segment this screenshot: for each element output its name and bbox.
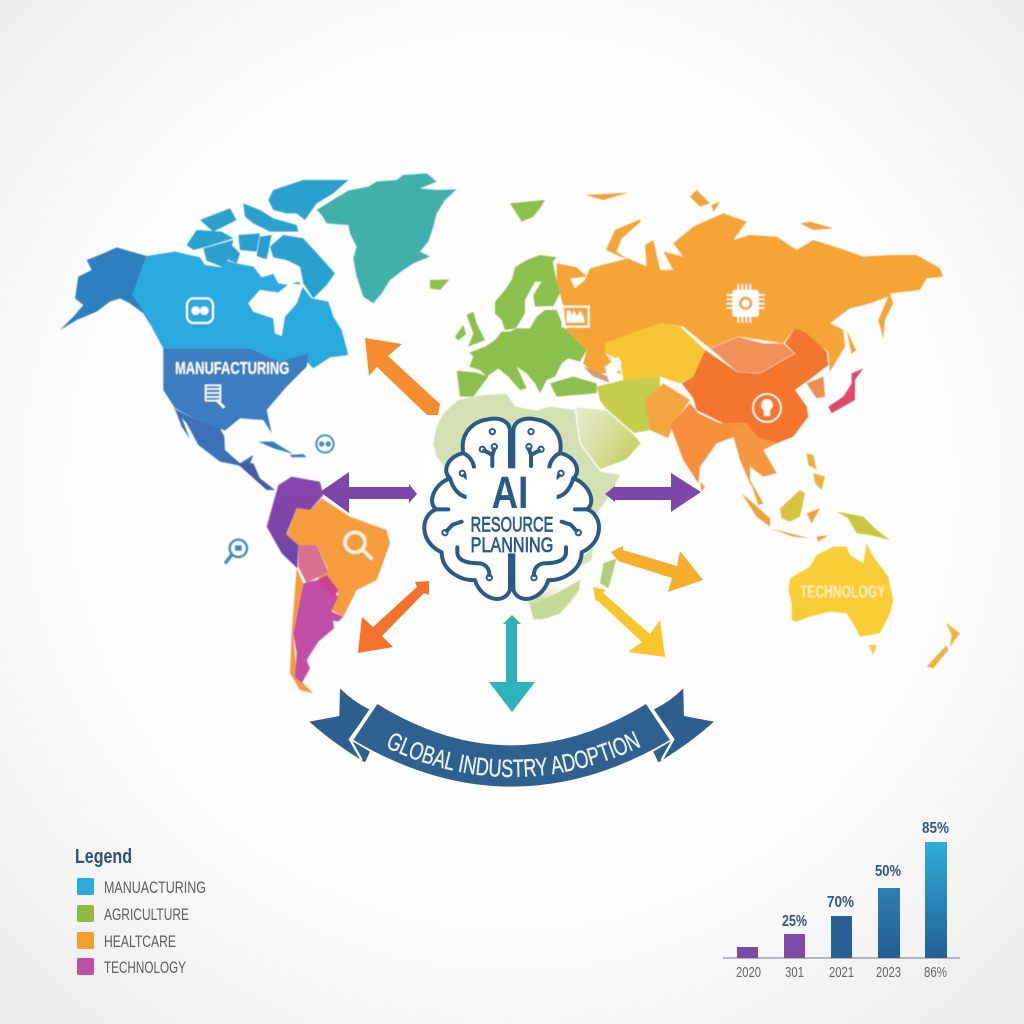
legend: manufacturing: MANUACTURING [104,878,206,897]
Korea [807,377,825,398]
bar 301: 25% [782,913,807,930]
legend: technology: TECHNOLOGY [104,958,186,977]
Borneo [780,490,805,522]
Canada [133,252,348,368]
Britain [467,312,485,347]
Brazil [287,498,390,617]
Arctic islands [585,190,833,230]
Paraguay [317,575,338,597]
Ireland [455,325,466,341]
bar 2023 [875,863,901,981]
arrow: west purple [320,472,417,513]
icon: magnifier left of South America [226,540,247,562]
arrow: southwest orange [358,581,429,653]
banner [309,688,714,787]
bar 86%: 86% [924,964,947,981]
Hudson Bay [248,283,303,336]
region: Oceania [742,480,960,668]
Philippines [807,453,825,490]
Sri Lanka [700,482,705,492]
banner fold lines [350,712,673,760]
legend: healthcare: HEALTCARE [104,932,176,951]
brain text: Resource: RESOURCE [471,512,553,536]
Mongolia [710,337,795,373]
Southeast Asia [732,423,777,498]
bar 2020 [736,947,761,981]
China [682,328,828,443]
bar 2023: 50% [875,863,901,880]
Europe mainland [469,310,587,393]
region: southern Africa [530,580,580,619]
region: Madagascar [600,558,617,588]
brain centre cover [467,468,557,553]
Caucasus [583,367,612,383]
region: South America [226,477,390,693]
Arctic islands [187,180,348,298]
region: Europe [430,200,597,397]
Argentina [293,580,338,683]
region: Asia [557,190,943,498]
banner title: GLOBAL INDUSTRY ADOPTION [388,731,640,778]
Japan [828,368,863,413]
axis [723,957,960,959]
Caspian [605,357,625,393]
banner main band [353,704,670,787]
Cuba [258,442,293,454]
brain text: Planning: PLANNING [471,533,553,557]
Iberia [457,371,488,397]
Hispaniola [290,454,307,457]
Tasmania [868,645,877,655]
arrow: east-southeast amber [611,546,703,592]
icon: factory badge [563,307,589,327]
bar 2021: 2021 [829,964,854,981]
Iceland [430,279,449,290]
region: Africa [433,394,620,620]
icon: magnifier on Brazil [345,532,371,558]
bar chart [723,820,960,981]
legend: agriculture: AGRICULTURE [104,905,189,924]
arrow: east purple [605,473,701,512]
brain right half [513,419,599,599]
USA [163,348,308,433]
arrow: south teal [489,615,535,712]
Svalbard [510,200,545,222]
icon: Canada gear badge [187,298,213,323]
New Guinea [837,512,890,540]
icon: document with magnifier [206,385,224,408]
legend [75,846,206,977]
brain heading: AI: AI [492,467,528,518]
region: North America [60,180,348,490]
Bolivia [298,545,328,583]
bar 2023: 2023 [876,964,901,981]
Kazakhstan [605,323,705,383]
Mexico [173,408,253,468]
New Zealand [927,623,960,668]
bar 86%: 85% [922,820,949,837]
Colombia Venezuela Peru [267,477,323,568]
label: Technology: TECHNOLOGY [800,581,885,601]
Alaska [60,247,152,330]
Uruguay [332,612,343,622]
Indonesia [742,480,828,542]
icon: chip [727,284,765,323]
central brain icon [424,419,599,599]
India [670,403,747,483]
Afghanistan Pakistan [645,383,690,438]
Chile [290,568,313,693]
bar 2020: 2020 [736,964,761,981]
label: Manufacturing: MANUFACTURING [175,358,289,378]
brain left half [424,419,510,599]
bar 2021: 70% [827,894,854,911]
Central America [237,463,275,490]
Scandinavia [495,255,560,330]
bar 301 [782,913,807,981]
Novaya Zemlya [606,219,641,260]
region: Greenland [317,173,457,303]
bar 86% [922,820,949,981]
Baja California [175,409,190,439]
Sakhalin [847,330,856,354]
Turkey [550,377,597,397]
bar 301: 301 [785,964,804,981]
arrow: southeast yellow [593,587,665,657]
arrow: northwest orange [365,338,440,415]
world map [60,173,960,693]
legend title: Legend [75,846,132,868]
icon: circle badge [316,435,334,453]
icon: bulb badge [753,394,781,422]
banner right tail [653,688,714,762]
banner left tail [309,688,370,762]
Australia [788,543,893,637]
Arabia [575,407,642,470]
Russia [557,213,943,373]
region: East Africa [580,547,593,567]
Iran [597,377,660,433]
bar 2021 [827,894,854,981]
